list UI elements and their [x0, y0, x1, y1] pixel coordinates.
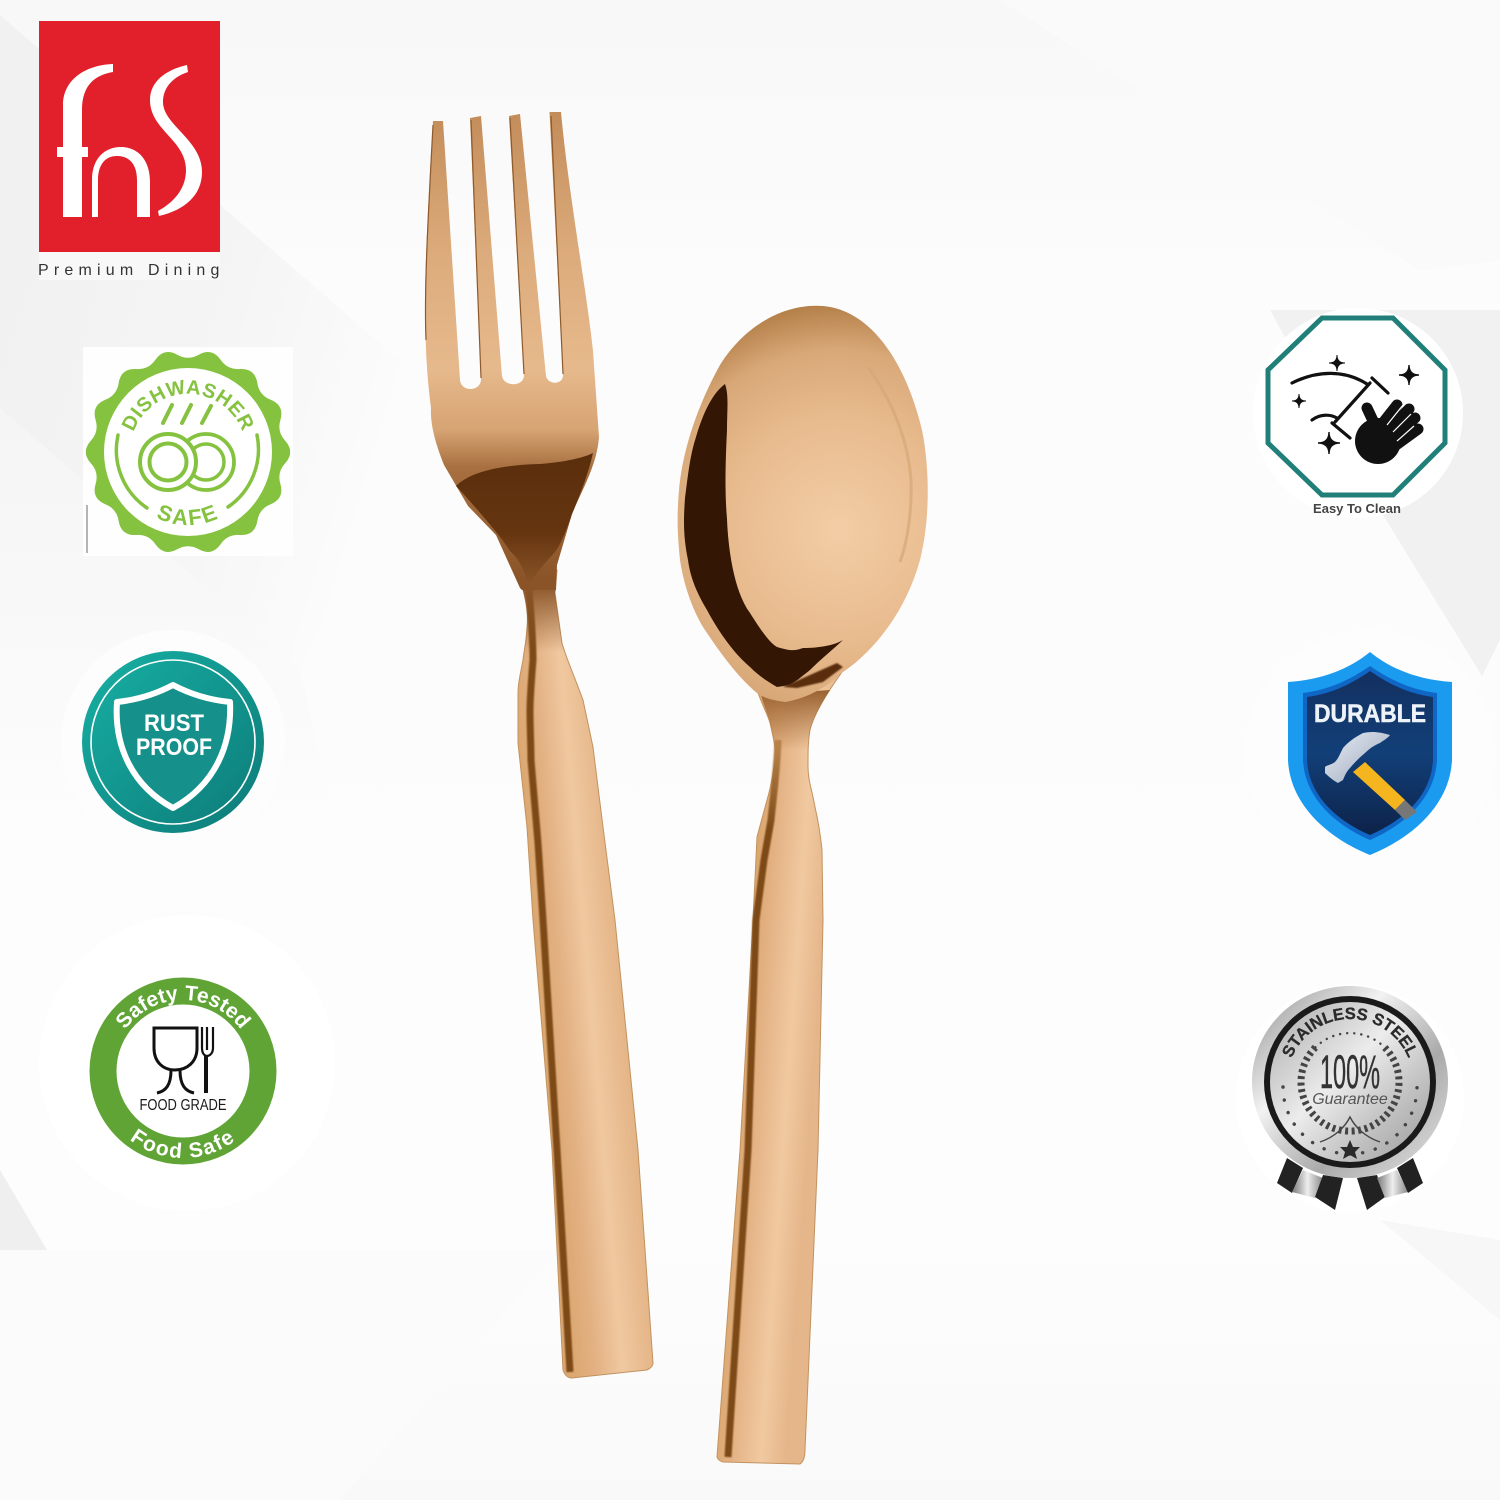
fork handle — [518, 570, 653, 1378]
badge: durable — [1245, 630, 1495, 880]
badge: food safe: Safety Tested — [116, 985, 252, 1029]
badge: stainless steel: STAINLESS STEEL — [1282, 1007, 1416, 1058]
badge: rust proof: RUST — [144, 710, 204, 737]
badge: durable: DURABLE — [1314, 700, 1426, 728]
icon: glass and fork — [154, 1027, 213, 1093]
badge: food safe: FOOD GRADE — [140, 1097, 226, 1114]
fork — [425, 112, 653, 1378]
badge: rust proof — [61, 630, 285, 854]
spoon handle — [717, 672, 842, 1464]
badge: easy to clean: Easy To Clean — [1313, 501, 1401, 516]
logo: FnS Premium Dining — [38, 21, 225, 280]
badge: easy to clean — [1253, 308, 1463, 518]
badge: stainless steel: Guarantee — [1312, 1091, 1388, 1108]
badge: dishwasher safe: SAFE — [158, 504, 218, 526]
spoon — [678, 306, 928, 1464]
badge: stainless steel: 100% — [1320, 1045, 1380, 1098]
icon: hammer — [1325, 732, 1417, 820]
badge: rust proof: PROOF — [136, 734, 212, 761]
badge: food safe: Food Safe — [130, 1128, 234, 1158]
fork neck reflection — [456, 453, 593, 585]
badge: dishwasher safe: DISHWASHER — [121, 380, 253, 432]
spoon bowl — [678, 306, 928, 702]
ribbon — [1277, 1158, 1423, 1210]
spoon handle reflection — [728, 740, 778, 1457]
fork head — [425, 112, 599, 590]
badge: dishwasher safe — [83, 347, 290, 556]
badge: food safe — [90, 978, 276, 1164]
spoon dark reflection — [684, 384, 843, 687]
icon: wiper and hand — [1292, 355, 1419, 464]
logo: FnS Premium Dining: Premium Dining — [38, 262, 225, 279]
icon: star — [1340, 1140, 1360, 1159]
badge: stainless steel — [1252, 986, 1448, 1210]
fork handle reflection — [529, 590, 570, 1372]
